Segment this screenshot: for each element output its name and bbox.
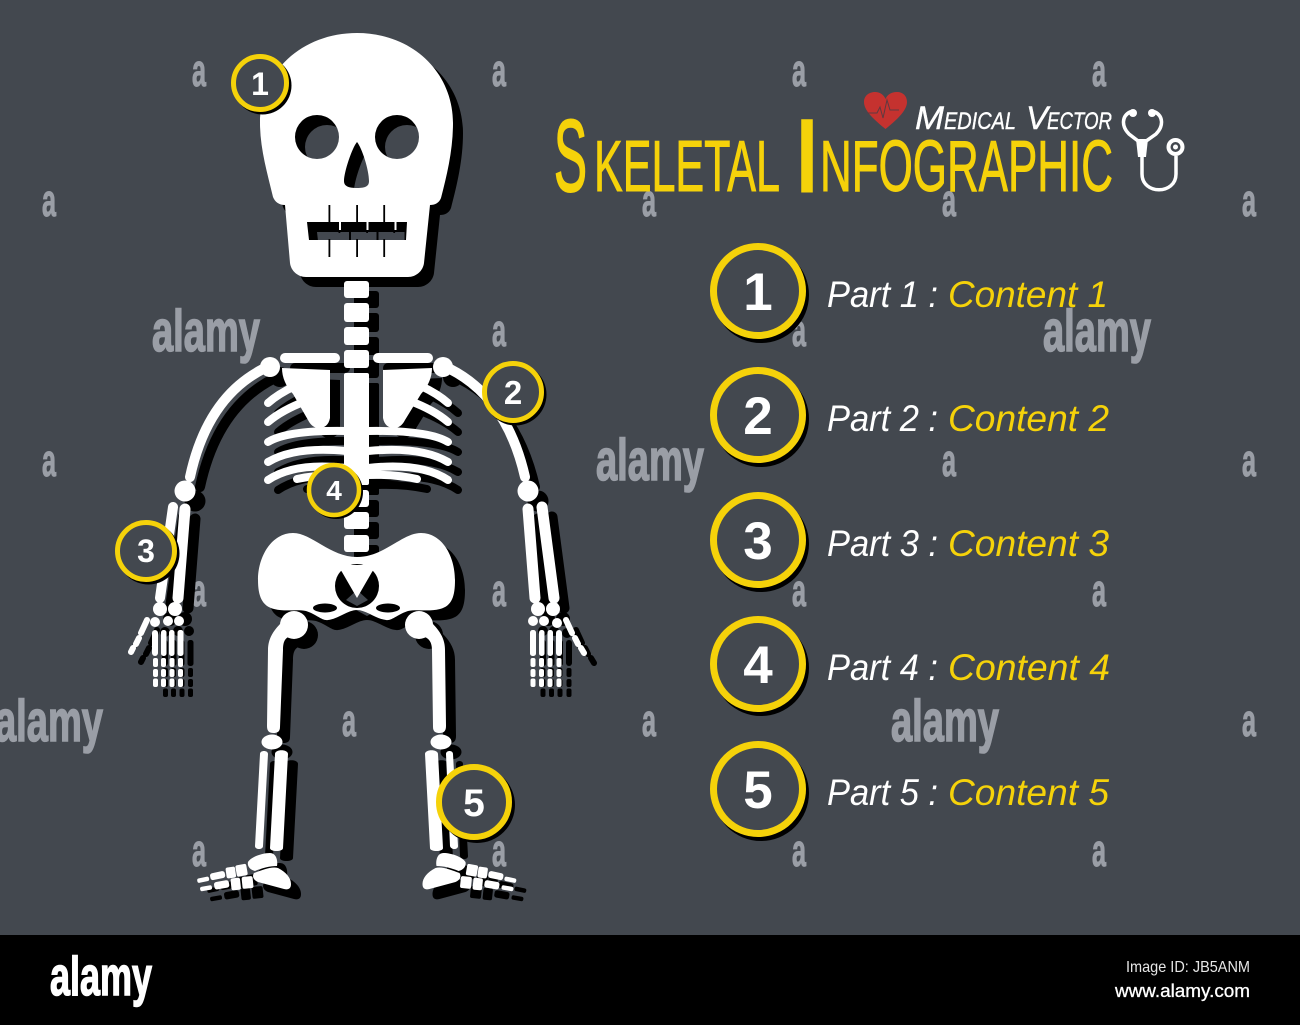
text: a — [1092, 565, 1107, 616]
text: a — [492, 825, 507, 876]
title: KELETAL — [594, 127, 780, 207]
list item 2: Part 2 : — [827, 398, 938, 439]
text: alamy — [1043, 299, 1151, 364]
list item 4: Part 4 : — [827, 647, 938, 688]
text: a — [492, 305, 507, 356]
callout 3 on forearm — [118, 522, 180, 584]
list item 1: Content 1 — [948, 274, 1108, 315]
sternum and spine — [344, 373, 369, 552]
list item 5 — [713, 744, 1109, 841]
subtitle: M — [915, 100, 944, 136]
list item 2: Content 2 — [948, 398, 1109, 439]
text: a — [42, 175, 57, 226]
subtitle: EDICAL — [944, 108, 1016, 135]
callout 2 on arm — [484, 364, 546, 426]
hand: left — [131, 602, 184, 687]
footer band: www.alamy.com — [1114, 981, 1250, 1001]
text: alamy — [891, 689, 999, 754]
text: a — [492, 565, 507, 616]
text: a — [792, 305, 807, 356]
text: a — [192, 825, 207, 876]
list item 4 — [713, 620, 1110, 716]
list item 4: Content 4 — [948, 647, 1110, 688]
list item 1: Part 1 : — [827, 274, 938, 315]
callout 5 on shin: 5 — [463, 782, 485, 825]
skeleton — [131, 33, 584, 892]
subtitle: ECTOR — [1047, 108, 1112, 135]
text: a — [192, 565, 207, 616]
text: a — [792, 45, 807, 96]
text: a — [192, 45, 207, 96]
footer band: alamy — [50, 945, 152, 1007]
neck vertebrae — [344, 281, 369, 368]
text: a — [1242, 695, 1257, 746]
text: a — [942, 435, 957, 486]
text: alamy — [152, 299, 260, 364]
callout 3 on forearm: 3 — [137, 533, 155, 569]
callout 2 on arm: 2 — [504, 374, 522, 411]
text: a — [1092, 45, 1107, 96]
hand: right — [528, 602, 584, 687]
text: alamy — [596, 428, 704, 493]
list item 1: 1 — [743, 263, 773, 322]
list item 4: 4 — [743, 636, 773, 695]
skeleton shadow — [141, 43, 594, 902]
text: a — [792, 565, 807, 616]
pelvis — [258, 533, 455, 620]
list item 5: Part 5 : — [827, 772, 938, 813]
callout 5 on shin — [439, 767, 515, 843]
text: a — [42, 435, 57, 486]
list item 2 — [713, 370, 1109, 467]
text: a — [792, 825, 807, 876]
callout 1 on skull: 1 — [251, 66, 269, 102]
text: a — [1242, 175, 1257, 226]
title: S — [554, 99, 587, 213]
list item 5: 5 — [743, 761, 773, 820]
leg: left — [255, 611, 308, 851]
list item 3: 3 — [743, 512, 773, 571]
foot: left — [197, 853, 291, 892]
text: a — [492, 45, 507, 96]
icon: stethoscope — [1123, 109, 1184, 190]
text: a — [1092, 825, 1107, 876]
list item 5: Content 5 — [948, 772, 1109, 813]
list item 3 — [713, 496, 1109, 592]
ribs — [268, 386, 448, 480]
subtitle: V — [1026, 100, 1051, 136]
text: a — [642, 175, 657, 226]
arm: left — [160, 357, 280, 598]
footer band — [0, 935, 1300, 1025]
scapulae — [282, 368, 432, 428]
list item 2: 2 — [743, 387, 773, 446]
subtitle — [915, 100, 1112, 136]
text: a — [1242, 435, 1257, 486]
text: a — [642, 695, 657, 746]
list item 3: Content 3 — [948, 523, 1109, 564]
callout 4 on ribs — [309, 465, 363, 519]
callout 4 on ribs: 4 — [326, 475, 342, 506]
footer band: Image ID: JB5ANM — [1126, 959, 1250, 976]
text: a — [942, 175, 957, 226]
list item 1 — [713, 246, 1108, 343]
text: a — [342, 695, 357, 746]
arm: right — [433, 357, 554, 598]
title: NFOGRAPHIC — [820, 127, 1113, 207]
skull — [260, 33, 453, 277]
title: I — [794, 99, 820, 213]
title — [554, 99, 1113, 213]
icon: heart — [864, 92, 907, 129]
leg: right — [405, 611, 458, 851]
list item 3: Part 3 : — [827, 523, 938, 564]
clavicles — [280, 353, 433, 363]
callout 1 on skull — [234, 56, 292, 114]
foot: right — [422, 853, 517, 892]
